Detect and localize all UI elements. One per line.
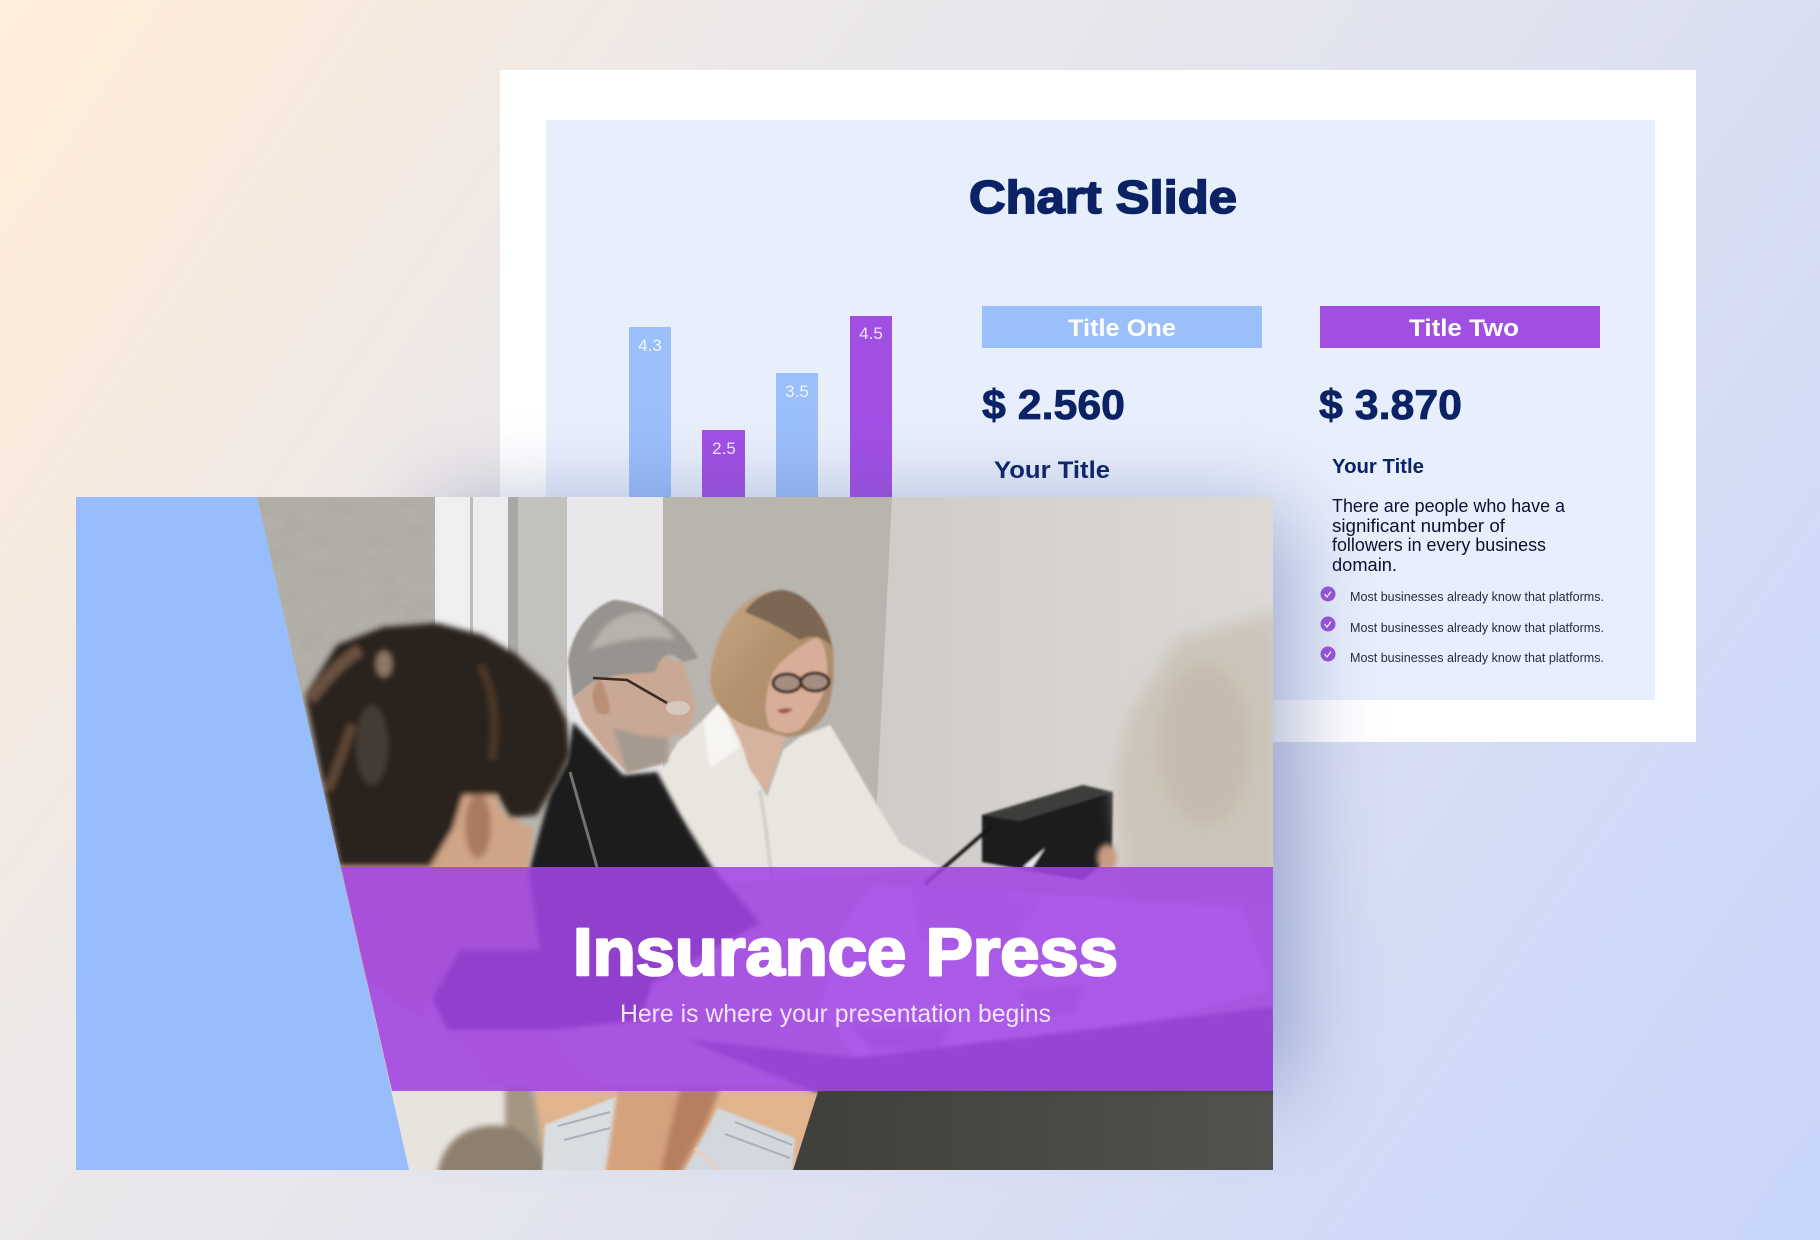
column: title two [1319,306,1600,575]
bar chart [629,316,892,502]
lower scene: table, papers, hand and jacket [390,1083,1273,1170]
checklist: Most businesses already know that platforms. [1350,620,1604,635]
man with grey hair [424,600,760,1030]
column: title two: Title Two [1409,315,1519,342]
woman in white shirt [657,590,945,885]
column: title one [982,306,1262,484]
column: title one: Title One [1068,315,1176,342]
blurred person on right [1115,610,1280,900]
column: title two: $ 3.870 [1319,381,1462,428]
soft shadow of front slide [430,510,1290,1090]
bag on table [925,785,1113,884]
checklist: Most businesses already know that platforms. [1350,589,1604,604]
column: title two: Your Title [1332,456,1424,478]
blue side polygon [76,497,409,1170]
blurred front person [305,623,570,1020]
bar chart: 3.5 [785,382,809,401]
checklist [1320,586,1604,665]
bar chart: 2.5 [712,439,736,458]
purple title band [341,867,1273,1091]
column: title one: $ 2.560 [982,381,1125,428]
column: title two: significant number of [1332,516,1506,536]
jacket under band [688,1007,1280,1092]
photo: meeting scene [250,497,1280,1180]
title: Insurance Press [573,915,1118,990]
heading: chart slide: Chart Slide [969,171,1237,223]
column: title one: Your Title [994,457,1110,484]
panel: back chart slide [500,70,1696,742]
bar chart: 4.3 [638,336,662,355]
subtitle: Here is where your presentation begins [620,1000,1051,1028]
slide inner panel [546,120,1655,700]
panel: front title slide [76,497,1280,1180]
column: title two: followers in every business [1332,535,1546,555]
column: title two: There are people who have a [1332,496,1566,516]
slide white frame [500,70,1696,742]
bar chart: 4.5 [859,324,883,343]
column: title two: domain. [1332,555,1397,575]
table and papers under band [342,866,1001,1085]
checklist: Most businesses already know that platforms. [1350,650,1604,665]
